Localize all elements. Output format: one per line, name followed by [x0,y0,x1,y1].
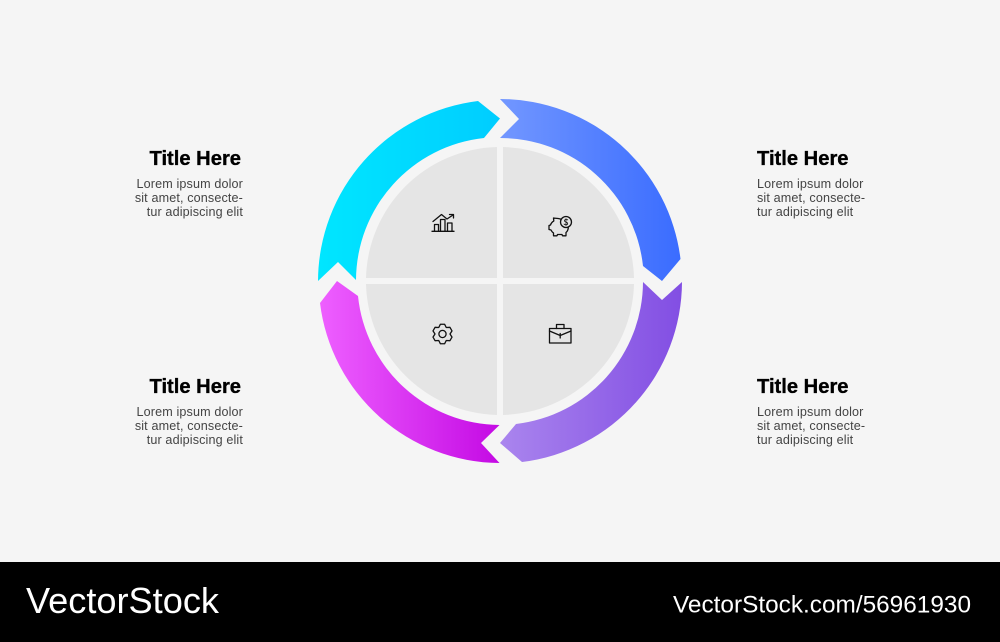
body text: Lorem ipsum dolor [136,405,243,419]
heading: Title Here [150,376,241,398]
text block: bottom-left [135,376,243,447]
text block: bottom-right [757,376,865,447]
text block: top-left [135,148,243,219]
body text: Lorem ipsum dolor [757,177,864,191]
body text: Lorem ipsum dolor [757,405,864,419]
body text: tur adipiscing elit [757,205,854,219]
icon: piggy bank with coin [549,216,572,236]
arrow: purple bottom-right [500,282,682,462]
footer image id: VectorStock.com/56961930 [673,592,971,618]
body text: sit amet, consecte- [757,419,865,433]
heading: Title Here [757,376,848,398]
quadrant: top-right [503,147,634,278]
heading: Title Here [150,148,241,170]
body text: tur adipiscing elit [147,433,243,447]
footer bar [0,562,1000,642]
body text: sit amet, consecte- [757,191,865,205]
quadrant: bottom-right [503,284,634,415]
body text: Lorem ipsum dolor [136,177,243,191]
body text: tur adipiscing elit [147,205,243,219]
text block: top-right [757,148,865,219]
centre circle quadrants [366,147,634,415]
body text: sit amet, consecte- [135,419,243,433]
arrow: cyan top-left [318,101,500,281]
circular arrow diagram [318,99,682,463]
quadrant: bottom-left [366,284,497,415]
icon: growth chart [432,214,454,231]
icon: briefcase [550,324,571,343]
body text: tur adipiscing elit [757,433,854,447]
heading: Title Here [757,148,848,170]
arrow: magenta bottom-left [320,281,500,463]
quadrant: top-left [366,147,497,278]
body text: sit amet, consecte- [135,191,243,205]
icon: gear [433,324,452,344]
footer logo text: VectorStock [26,580,220,621]
arrow: blue top-right [500,99,680,281]
